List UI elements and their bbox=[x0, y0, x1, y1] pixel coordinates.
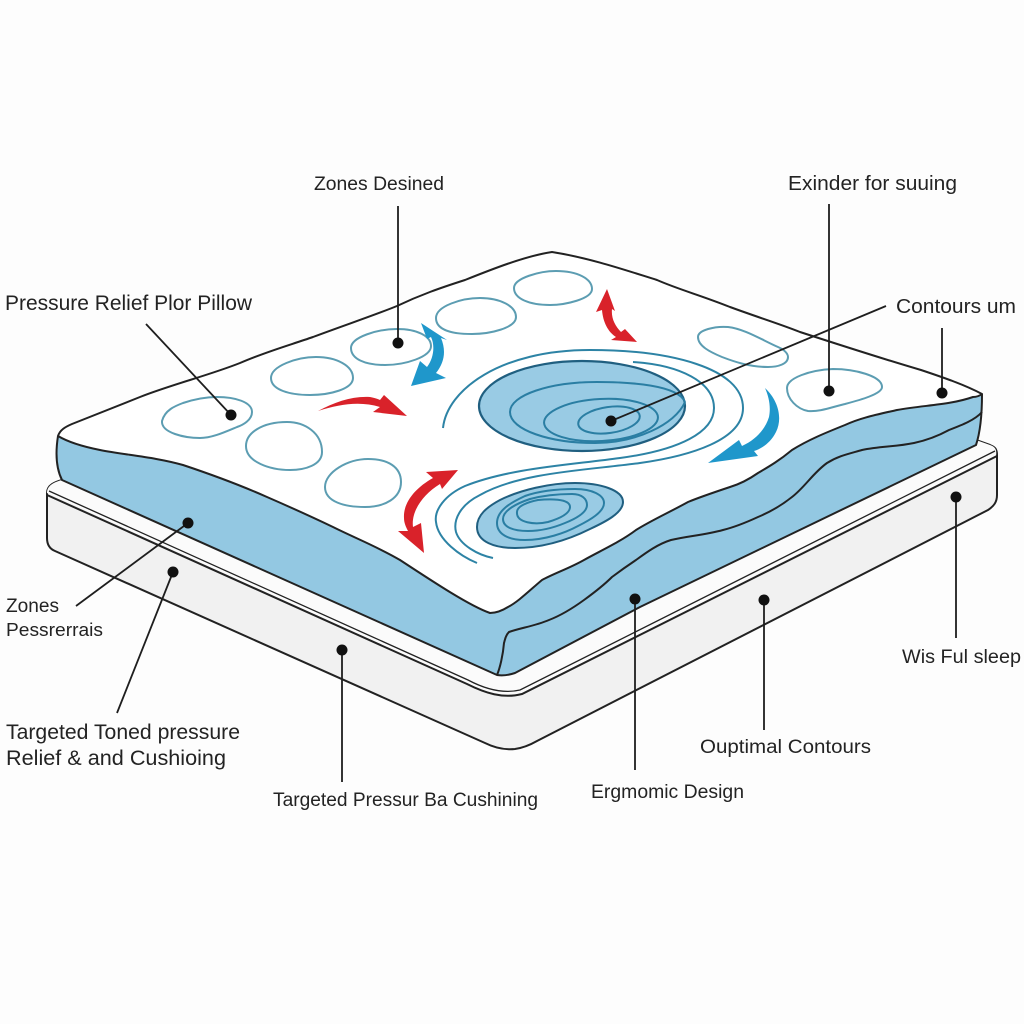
blue arrow: right bbox=[708, 388, 779, 463]
label: targeted toned pressure: Targeted Toned pressure bbox=[6, 721, 240, 744]
label: restful sleep: Wis Ful sleep bbox=[902, 647, 1021, 668]
base platform bbox=[47, 440, 997, 749]
label: optimal contours: Ouptimal Contours bbox=[700, 737, 871, 758]
mattress top bbox=[58, 252, 982, 613]
label: ergonomic design: Ergmomic Design bbox=[591, 782, 744, 803]
label: pressure relief: Pressure Relief Plor Pillow bbox=[5, 292, 253, 315]
label: targeted toned pressure: Relief & and Cushioing bbox=[6, 747, 226, 770]
red arrow: middle bbox=[318, 395, 407, 416]
callout dots bbox=[168, 338, 962, 656]
label: targeted cushioning: Targeted Pressur Ba Cushining bbox=[273, 790, 538, 811]
label: zones designed: Zones Desined bbox=[314, 174, 444, 195]
foam contour line bbox=[497, 412, 982, 675]
label: targeted toned pressure bbox=[6, 721, 240, 770]
small contour zone bbox=[477, 483, 623, 548]
large contour zone bbox=[479, 361, 685, 451]
red arrow: lower bbox=[398, 470, 458, 553]
label: zones pressure: Zones bbox=[6, 596, 59, 617]
label: zones pressure bbox=[6, 596, 103, 640]
label: contours: Contours um bbox=[896, 296, 1016, 318]
red arrow: top bbox=[596, 289, 637, 342]
blue arrow: left bbox=[411, 323, 447, 386]
label: zones pressure: Pessrerrais bbox=[6, 620, 103, 640]
leader lines bbox=[76, 204, 956, 782]
pressure zones bbox=[162, 271, 882, 507]
foam side layer bbox=[57, 394, 982, 675]
label: extender: Exinder for suuing bbox=[788, 173, 957, 195]
swirl lines bbox=[436, 350, 743, 563]
